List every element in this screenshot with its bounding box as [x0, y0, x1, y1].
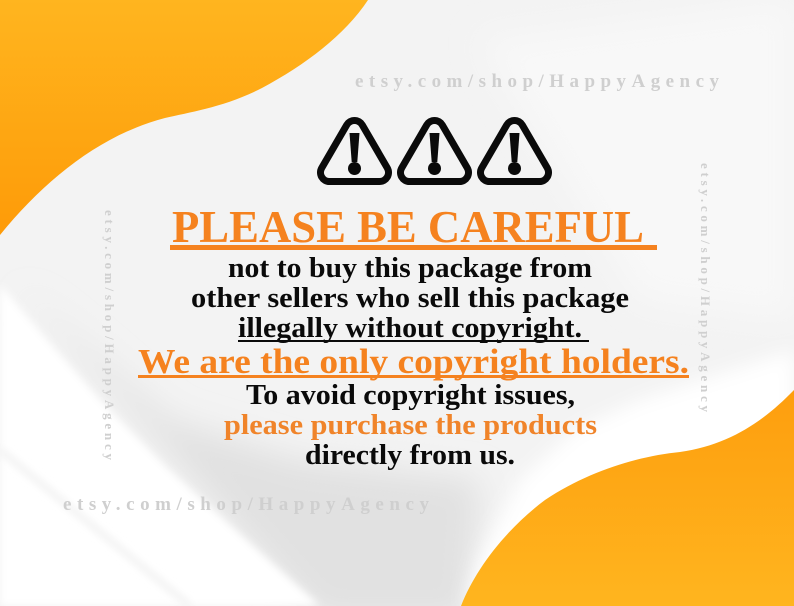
text block: warning: not to buy this package from: [228, 252, 592, 284]
watermark: bottom: etsy.com/shop/HappyAgency: [63, 494, 430, 515]
icon: warning triangle 1: [320, 120, 389, 182]
text block: advice: directly from us.: [305, 439, 515, 471]
shape: top-left orange wave: [0, 0, 368, 235]
text block: warning: illegally without copyright.: [238, 312, 582, 344]
text block: warning: [191, 252, 629, 344]
text block: warning: other sellers who sell this package: [191, 282, 629, 314]
icon: warning triangle 3: [480, 120, 549, 182]
icon: warning triangle 2: [400, 120, 469, 182]
text block: advice: please purchase the products: [224, 409, 597, 441]
text block: advice: To avoid copyright issues,: [246, 379, 575, 411]
shape: bottom-right orange wave: [461, 390, 794, 606]
callout: only copyright holders: We are the only copyright holders.: [138, 342, 689, 381]
heading: please be careful: PLEASE BE CAREFUL: [172, 201, 644, 252]
watermark: top: etsy.com/shop/HappyAgency: [355, 71, 720, 92]
icon: warning triangles: [320, 120, 549, 182]
text block: advice: [224, 379, 597, 471]
watermark: right vertical: etsy.com/shop/HappyAgency: [698, 163, 713, 412]
watermark: left vertical: etsy.com/shop/HappyAgency: [102, 210, 117, 460]
